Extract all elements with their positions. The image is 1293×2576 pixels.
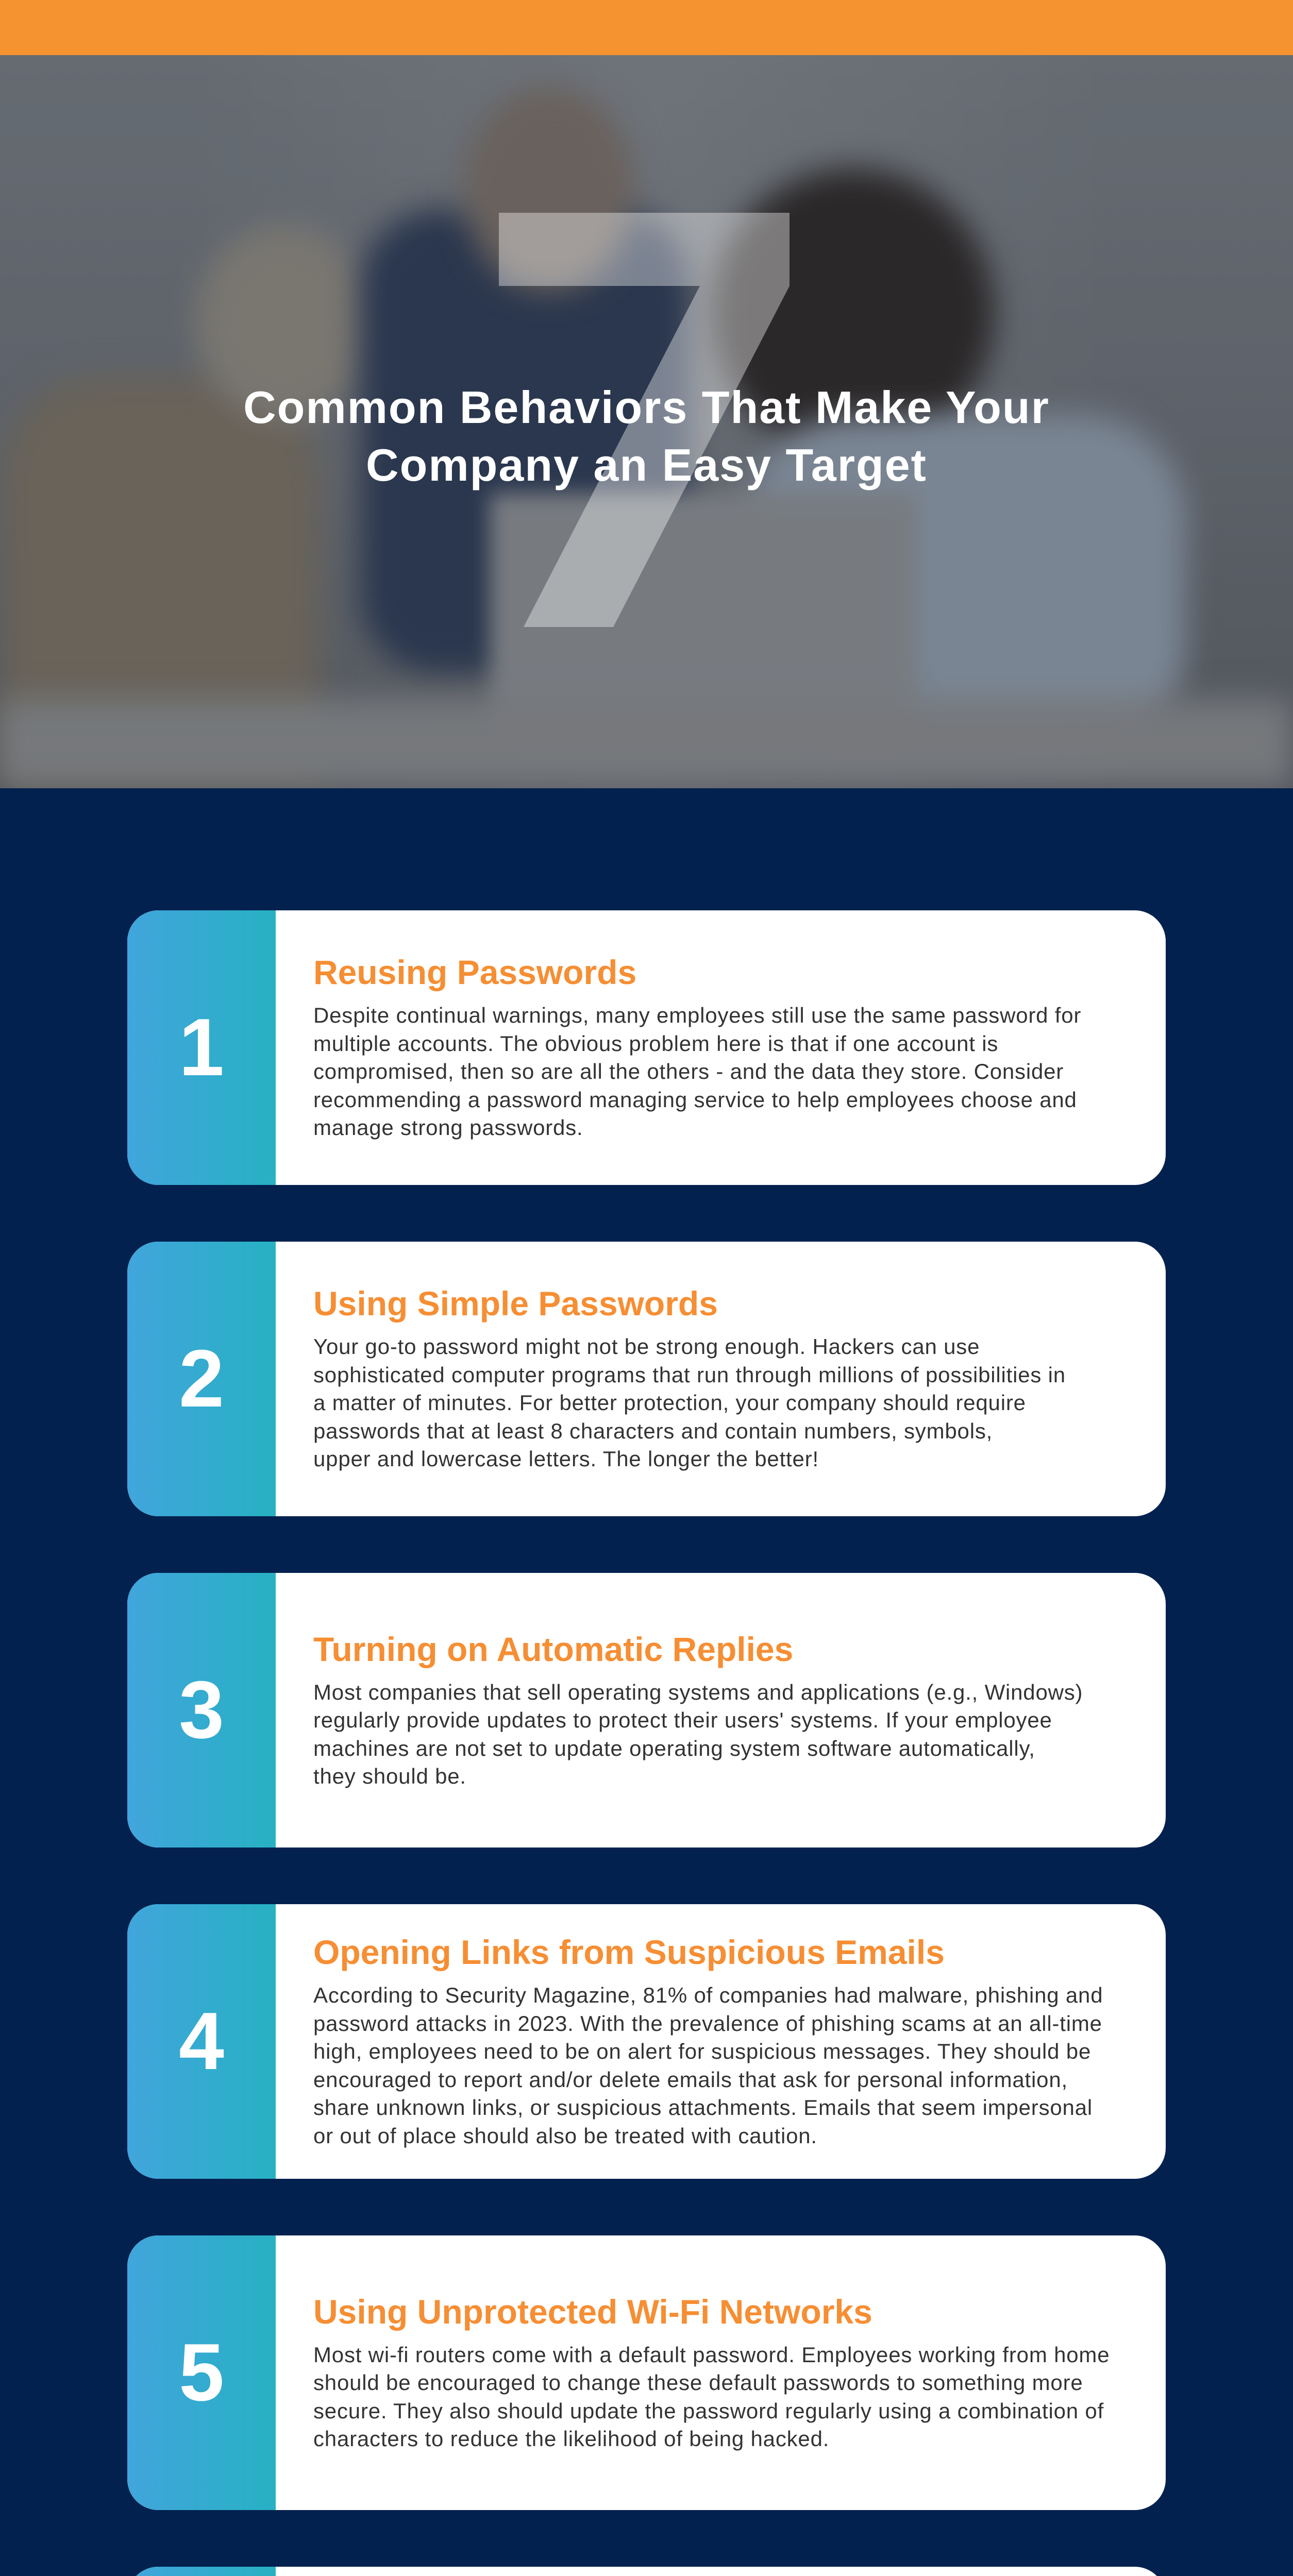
card 4 text: Opening Links from Suspicious Emails	[313, 1933, 945, 1971]
card 3 text: machines are not set to update operating system software automatically,	[313, 1736, 1035, 1760]
card 4 text: password attacks in 2023. With the prevalence of phishing scams at an all-time	[313, 2011, 1102, 2035]
card 5 text: Most wi-fi routers come with a default password. Employees working from home	[313, 2342, 1110, 2367]
title: Company an Easy Target	[366, 439, 927, 490]
card 4 text: high, employees need to be on alert for suspicious messages. They should be	[313, 2039, 1091, 2063]
card 1 text: Despite continual warnings, many employees still use the same password for	[313, 1003, 1081, 1027]
top orange bar	[0, 0, 1293, 55]
card 3 text: regularly provide updates to protect their users' systems. If your employee	[313, 1708, 1052, 1732]
card 4 text	[313, 1933, 1103, 2147]
number 6	[127, 2567, 276, 2576]
card 4 text: or out of place should also be treated with caution.	[313, 2124, 817, 2147]
number 5: 5	[179, 2327, 224, 2418]
title: Common Behaviors That Make Your	[243, 382, 1050, 433]
card 4	[127, 1904, 1166, 2179]
card 1 text: multiple accounts. The obvious problem here is that if one account is	[313, 1031, 998, 1056]
card 1 text	[313, 953, 1081, 1140]
card 5 text: characters to reduce the likelihood of being hacked.	[313, 2427, 829, 2451]
card 1	[127, 910, 1166, 1185]
card 1 text: recommending a password managing service to help employees choose and	[313, 1088, 1077, 1112]
card 2 text	[313, 1284, 1066, 1471]
card 1 text: manage strong passwords.	[313, 1115, 583, 1140]
card 5	[127, 2235, 1166, 2510]
card 4 text: encouraged to report and/or delete emails that ask for personal information,	[313, 2067, 1068, 2092]
card 2	[127, 1242, 1166, 1516]
number 3: 3	[179, 1665, 224, 1755]
card 1 text: compromised, then so are all the others - and the data they store. Consider	[313, 1059, 1064, 1083]
card 2 text: passwords that at least 8 characters and contain numbers, symbols,	[313, 1419, 993, 1443]
card 3 text: they should be.	[313, 1764, 466, 1788]
card 6	[127, 2567, 1166, 2576]
big number 7	[499, 213, 790, 627]
card 3 text	[313, 1630, 1083, 1788]
card 2 text: upper and lowercase letters. The longer the better!	[313, 1447, 819, 1471]
card 4 text: According to Security Magazine, 81% of companies had malware, phishing and	[313, 1983, 1103, 2007]
card 5 text: secure. They also should update the password regularly using a combination of	[313, 2399, 1104, 2422]
card 3 text: Most companies that sell operating systems and applications (e.g., Windows)	[313, 1680, 1083, 1704]
card 4 text: share unknown links, or suspicious attachments. Emails that seem impersonal	[313, 2095, 1093, 2120]
card 2 text: sophisticated computer programs that run through millions of possibilities in	[313, 1363, 1066, 1387]
card 1 text: Reusing Passwords	[313, 953, 636, 991]
card 2 text: a matter of minutes. For better protection, your company should require	[313, 1391, 1026, 1415]
card 6 text	[313, 2567, 1145, 2576]
card 5 text: should be encouraged to change these default passwords to something more	[313, 2370, 1083, 2395]
card 5 text: Using Unprotected Wi-Fi Networks	[313, 2293, 872, 2331]
number 2: 2	[179, 1333, 224, 1424]
card 3 text: Turning on Automatic Replies	[313, 1630, 793, 1668]
number 1: 1	[179, 1002, 224, 1093]
number 4: 4	[179, 1996, 224, 2087]
card 2 text: Your go-to password might not be strong enough. Hackers can use	[313, 1334, 980, 1359]
hero photo	[0, 55, 1293, 788]
title	[243, 382, 1050, 490]
card 2 text: Using Simple Passwords	[313, 1284, 718, 1323]
card 3	[127, 1573, 1166, 1848]
card 5 text	[313, 2293, 1110, 2451]
